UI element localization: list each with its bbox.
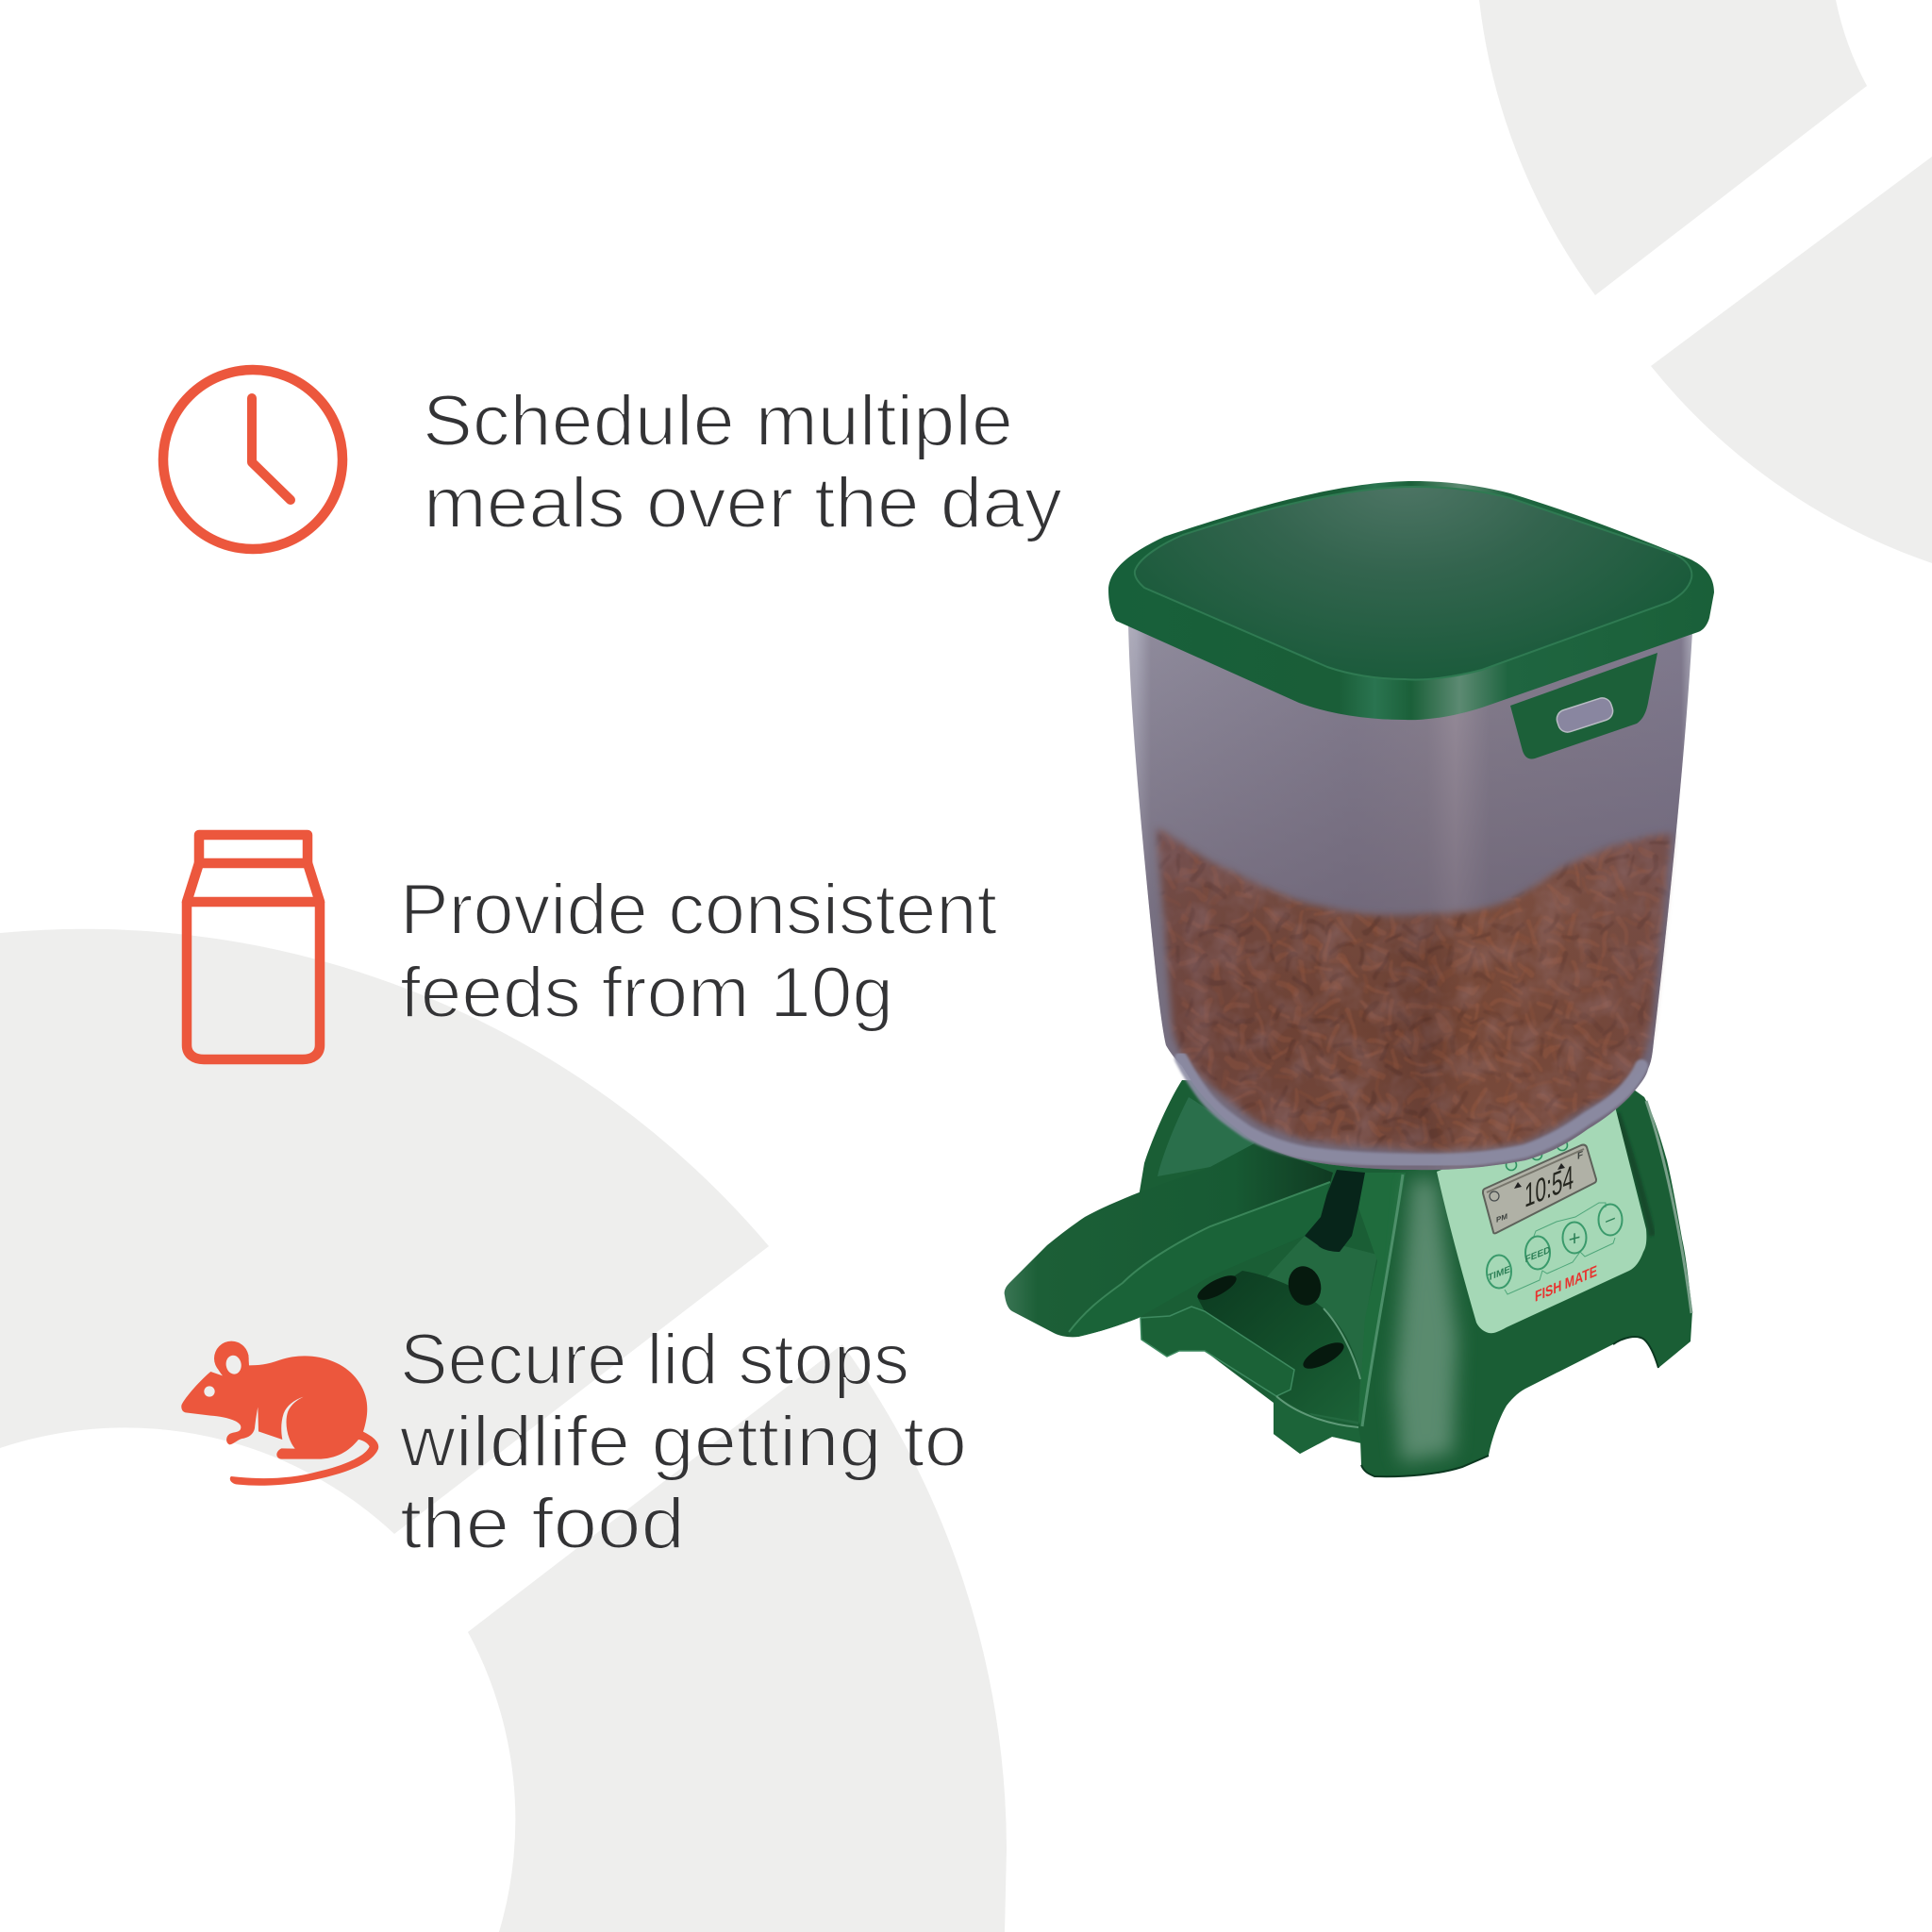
icon: food bag <box>187 835 320 1059</box>
dispensing chute <box>1005 1143 1333 1337</box>
tray rim <box>1141 1307 1294 1396</box>
button labels <box>1488 1208 1616 1284</box>
button labels: TIME <box>1488 1264 1510 1284</box>
icon: mouse <box>181 1341 378 1486</box>
feature text: consistent feeds: feeds from 10g <box>400 953 893 1033</box>
base right edge <box>1646 1101 1691 1313</box>
feature text: consistent feeds: Provide consistent <box>400 870 997 950</box>
icon: clock <box>163 370 342 549</box>
left wing panel <box>1158 1097 1255 1176</box>
button labels: + <box>1569 1225 1580 1252</box>
feature text: schedule meals: meals over the day <box>424 463 1062 543</box>
base holes <box>1194 1271 1240 1305</box>
timer icons <box>1506 1140 1568 1170</box>
lcd time: 10:54 <box>1524 1158 1574 1215</box>
feature text: secure lid: the food <box>400 1484 685 1564</box>
pm label: PM <box>1496 1212 1507 1224</box>
tray floor <box>1198 1271 1360 1422</box>
dark cavity <box>1305 1170 1365 1252</box>
control panel <box>1437 1099 1646 1333</box>
product: automatic fish feeder <box>1005 481 1714 1476</box>
feature text: schedule meals: Schedule multiple <box>423 381 1013 461</box>
feature text: secure lid <box>399 1320 967 1564</box>
feature text: secure lid: wildlife getting to <box>399 1402 967 1482</box>
f label: F <box>1577 1150 1583 1162</box>
base foot shadow <box>1361 1337 1658 1476</box>
brand name: FISH MATE <box>1535 1262 1597 1306</box>
base front strip <box>1358 1173 1406 1427</box>
lcd markers <box>1514 1163 1565 1189</box>
feeder base <box>1140 1080 1692 1476</box>
base body highlight <box>1394 1179 1457 1462</box>
lid latch <box>1510 653 1657 759</box>
food hopper <box>1123 623 1707 1189</box>
hopper bottom rim <box>1181 1058 1641 1160</box>
hopper lid <box>1108 481 1714 720</box>
button labels: − <box>1605 1208 1616 1233</box>
feature text: secure lid: Secure lid stops <box>400 1320 909 1400</box>
feature text: schedule meals <box>423 381 1062 543</box>
feature text: consistent feeds <box>400 870 997 1033</box>
tray lip <box>1274 1396 1361 1454</box>
pellets <box>1153 826 1677 1154</box>
tray backdrop <box>1226 1236 1377 1424</box>
button labels: FEED <box>1525 1245 1551 1265</box>
lcd screen <box>1483 1145 1596 1233</box>
panel buttons <box>1487 1203 1623 1294</box>
